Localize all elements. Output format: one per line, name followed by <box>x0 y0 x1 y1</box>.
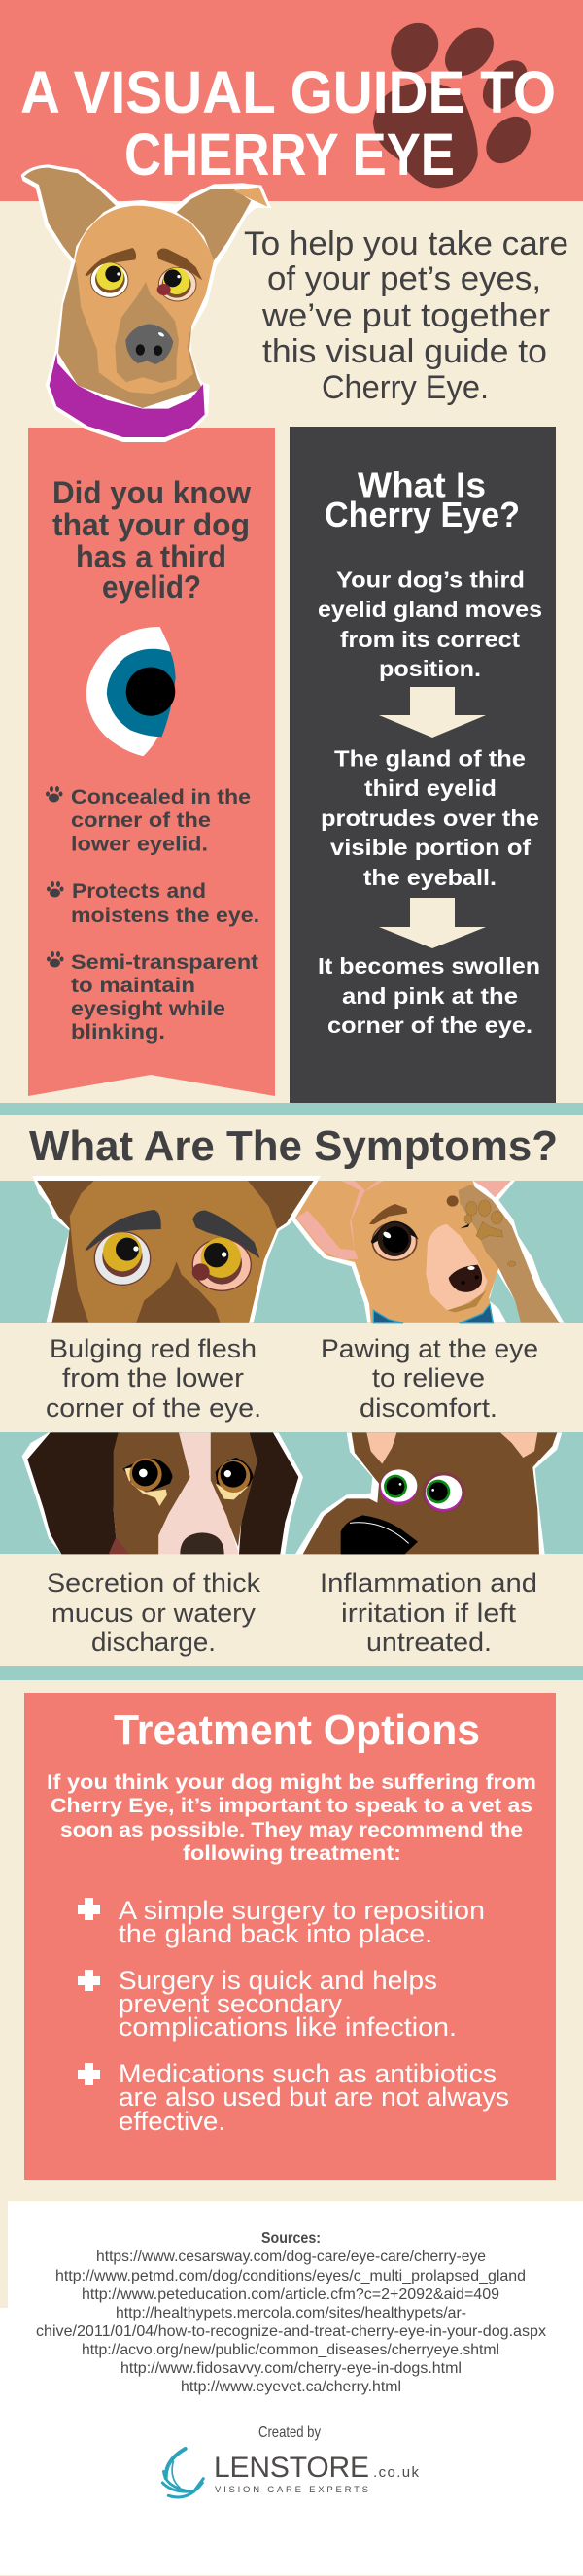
outline <box>295 1432 562 1554</box>
left eye <box>90 262 128 297</box>
sources list: http://www.fidosavvy.com/cherry-eye-in-dogs.html <box>120 2360 462 2377</box>
nose <box>341 1515 418 1554</box>
illustration: hero dog <box>21 164 271 442</box>
illustration: dog pawing at eye <box>290 1181 565 1323</box>
ribbon shape <box>28 428 275 1096</box>
caption: bulging red flesh: Bulging red flesh <box>50 1334 257 1363</box>
eyebrows <box>85 248 202 280</box>
outline <box>32 1176 321 1323</box>
face <box>75 206 214 394</box>
divider band <box>0 1666 583 1680</box>
icon: paw bullet <box>47 951 64 968</box>
divider band <box>0 1103 583 1115</box>
icon: plus <box>78 1898 100 1920</box>
intro text: of your pet’s eyes, <box>267 260 541 297</box>
coral background <box>24 1693 556 2180</box>
left eye <box>123 1459 173 1506</box>
paw leg <box>459 1185 560 1323</box>
caption: pawing at the eye: to relieve <box>372 1363 485 1392</box>
sources list: https://www.cesarsway.com/dog-care/eye-care/cherry-eye <box>96 2249 486 2265</box>
bullet: concealed: Concealed in the <box>71 785 251 808</box>
intro text <box>244 225 568 406</box>
right eye with cherry eye <box>192 1238 251 1290</box>
right eye <box>423 1472 465 1512</box>
head <box>114 1432 257 1554</box>
caption: inflammation: Inflammation and <box>320 1568 537 1597</box>
heading: symptoms: What Are The Symptoms? <box>29 1122 558 1170</box>
step 2 text: protrudes over the <box>321 806 539 831</box>
snout <box>426 1224 488 1310</box>
notch between ears <box>361 1181 371 1185</box>
intro paragraph: If you think your dog might be suffering from <box>47 1770 536 1794</box>
header band <box>0 0 583 201</box>
icon: paw bullet <box>46 786 62 803</box>
sources list: http://www.petmd.com/dog/conditions/eyes/c_multi_prolapsed_gland <box>55 2268 526 2284</box>
eye <box>371 1221 419 1260</box>
ear fold <box>232 188 267 207</box>
caption: pawing at the eye: Pawing at the eye <box>321 1334 538 1363</box>
step 3 text <box>318 953 540 1038</box>
left eye <box>94 1232 151 1285</box>
step 2 text <box>321 746 539 890</box>
logo: Lenstore: LENSTORE <box>214 2452 369 2484</box>
caption: inflammation <box>320 1568 537 1657</box>
bullet: concealed <box>46 785 251 855</box>
step 1 text: Your dog’s third <box>336 567 525 593</box>
icon: plus <box>78 2063 100 2085</box>
treatment 2: prevent secondary <box>119 1989 343 2018</box>
intro text: Cherry Eye. <box>322 369 489 406</box>
eyebrow <box>369 1204 407 1224</box>
caption: secretion: discharge. <box>91 1628 216 1657</box>
bullet: semi-transparent: blinking. <box>71 1020 165 1044</box>
bullet: semi-transparent: eyesight while <box>71 997 225 1020</box>
heading: treatment options: Treatment Options <box>114 1706 480 1754</box>
step 1 text: position. <box>379 656 481 681</box>
nose <box>449 1265 482 1292</box>
step 2 text: The gland of the <box>334 746 526 772</box>
sources list: http://acvo.org/new/public/common_diseases/cherryeye.shtml <box>82 2342 499 2358</box>
treatment 2 <box>78 1966 457 2042</box>
sources list: http://www.eyevet.ca/cherry.html <box>181 2379 401 2395</box>
eyebrows <box>85 1210 259 1258</box>
illustration: beagle with discharge <box>22 1432 303 1554</box>
arrow 2 <box>379 898 486 948</box>
bullet: protects <box>47 879 259 927</box>
band: symptom row 1 <box>0 1181 583 1323</box>
bullet: semi-transparent <box>47 950 258 1044</box>
outline <box>290 1181 565 1323</box>
right eye with cherry eye <box>157 267 196 301</box>
icon: eye <box>86 627 176 756</box>
ears <box>27 1432 298 1554</box>
heading: what is cherry eye <box>325 464 520 534</box>
illustration: dog with bulging red flesh <box>32 1176 321 1323</box>
intro text: this visual guide to <box>262 333 547 370</box>
title: A VISUAL GUIDE TO <box>20 59 556 125</box>
heading: did you know: that your dog <box>52 507 250 542</box>
step 2 text: the eyeball. <box>363 865 497 890</box>
logo: Lenstore <box>162 2449 420 2497</box>
step 1 text: eyelid gland moves <box>318 597 542 622</box>
intro paragraph: following treatment: <box>183 1841 401 1865</box>
collar <box>50 353 205 437</box>
arrow 1 <box>379 687 486 738</box>
band: symptom row 2 <box>0 1432 583 1554</box>
dark background <box>290 427 556 1103</box>
sources list <box>36 2230 546 2395</box>
icon: paw bullet <box>47 881 64 898</box>
intro paragraph: soon as possible. They may recommend the <box>60 1818 523 1841</box>
step 2 text: third eyelid <box>364 775 497 801</box>
treatment 3: are also used but are not always <box>119 2082 509 2112</box>
sources list: chive/2011/01/04/how-to-recognize-and-treat-cherry-eye-in-your-dog.aspx <box>36 2323 546 2340</box>
heading: did you know <box>52 475 251 604</box>
intro paragraph: Cherry Eye, it’s important to speak to a vet as <box>51 1794 532 1817</box>
outline <box>22 1432 303 1554</box>
collar <box>109 1537 129 1554</box>
sources list: Sources: <box>261 2230 321 2247</box>
inner ears <box>296 1181 511 1260</box>
body and ears <box>295 1181 498 1323</box>
body <box>303 1432 557 1554</box>
head <box>70 1181 277 1323</box>
sources list: http://www.peteducation.com/article.cfm?c=2+2092&aid=409 <box>82 2286 499 2303</box>
paw pads <box>464 1200 516 1266</box>
treatment 3 <box>78 2059 509 2136</box>
logo: Lenstore: VISION CARE EXPERTS <box>215 2485 368 2495</box>
bullet: protects: Protects and <box>72 879 206 903</box>
heading: what is cherry eye: What Is <box>358 464 486 505</box>
panel: footer <box>0 2201 583 2575</box>
caption: inflammation: untreated. <box>366 1628 492 1657</box>
treatment 1: A simple surgery to reposition <box>119 1896 485 1925</box>
step 3 text: corner of the eye. <box>327 1013 532 1038</box>
bullet: concealed: corner of the <box>71 808 211 832</box>
blaze <box>158 1432 239 1554</box>
muzzle <box>115 282 179 383</box>
heading: did you know: eyelid? <box>102 569 201 604</box>
nose <box>180 1532 224 1554</box>
right eye <box>216 1458 254 1499</box>
step 1 text: from its correct <box>340 627 520 652</box>
collar <box>373 1304 493 1323</box>
dog outline <box>21 164 271 442</box>
bullet: semi-transparent: Semi-transparent <box>71 950 258 974</box>
illustration: brown dog with irritated eyes <box>295 1432 562 1554</box>
treatment 1: the gland back into place. <box>119 1919 432 1948</box>
step 2 text: visible portion of <box>330 835 531 860</box>
panel: treatment options <box>24 1693 556 2180</box>
title <box>20 59 556 188</box>
bullet: protects: moistens the eye. <box>71 904 259 927</box>
treatment 2: complications like infection. <box>119 2012 457 2042</box>
ears and neck <box>37 1181 314 1323</box>
ears <box>366 1432 537 1464</box>
logo: Lenstore: .co.uk <box>373 2464 420 2481</box>
heading: did you know: has a third <box>76 539 226 574</box>
eyelash <box>460 1223 469 1228</box>
caption: inflammation: irritation if left <box>341 1598 517 1628</box>
icon: lenstore swoosh <box>162 2449 203 2497</box>
caption: pawing at the eye <box>321 1334 538 1423</box>
treatment 3: Medications such as antibiotics <box>119 2059 497 2088</box>
mouth shadow <box>447 1290 487 1312</box>
caption: bulging red flesh: corner of the eye. <box>46 1393 261 1423</box>
step 1 text <box>318 567 542 681</box>
icon: paw print <box>373 17 539 188</box>
created by: Created by <box>258 2424 321 2441</box>
intro paragraph <box>47 1770 536 1865</box>
panel: third eyelid ribbon <box>28 428 275 1096</box>
heading: what is cherry eye: Cherry Eye? <box>325 495 520 534</box>
treatment 2: Surgery is quick and helps <box>119 1966 437 1995</box>
brown spot <box>447 1195 459 1207</box>
caption: bulging red flesh <box>46 1334 261 1423</box>
treatment 3: effective. <box>119 2107 225 2136</box>
snout <box>136 1261 221 1323</box>
heading: did you know: Did you know <box>52 475 251 510</box>
bullet: concealed: lower eyelid. <box>71 832 208 855</box>
caption: secretion: Secretion of thick <box>47 1568 261 1597</box>
caption: pawing at the eye: discomfort. <box>360 1393 497 1423</box>
left eye <box>380 1469 417 1505</box>
bullet: semi-transparent: to maintain <box>71 974 195 997</box>
step 3 text: and pink at the <box>342 983 518 1009</box>
nose <box>125 324 173 364</box>
icon: plus <box>78 1970 100 1991</box>
panel: what is cherry eye <box>290 427 556 1103</box>
treatment 1 <box>78 1896 485 1948</box>
ears and neck <box>24 168 251 408</box>
caption: secretion <box>47 1568 261 1657</box>
caption: bulging red flesh: from the lower <box>62 1363 244 1392</box>
intro text: we’ve put together <box>261 297 550 334</box>
sources list: http://healthypets.mercola.com/sites/healthypets/ar- <box>116 2305 466 2321</box>
caption: secretion: mucus or watery <box>51 1598 257 1628</box>
title: CHERRY EYE <box>124 121 455 188</box>
step 3 text: It becomes swollen <box>318 953 540 979</box>
intro text: To help you take care <box>244 225 568 262</box>
